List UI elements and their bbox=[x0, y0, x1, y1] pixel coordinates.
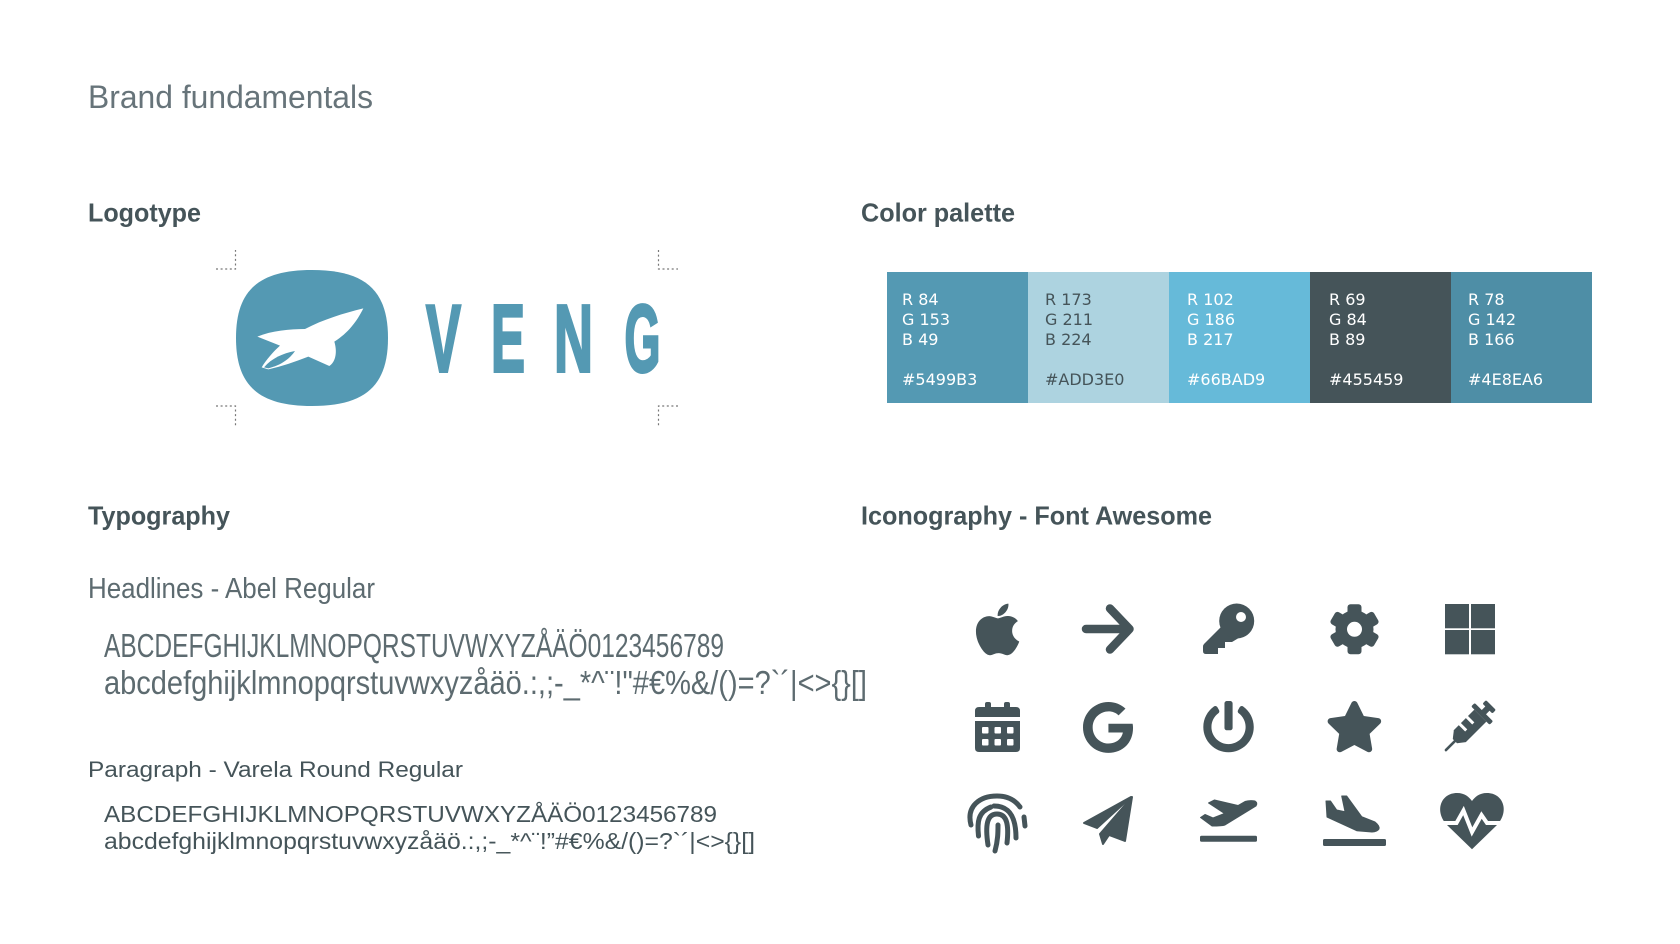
logo wordmark: N bbox=[554, 286, 593, 392]
panel: icon grid bbox=[970, 604, 1506, 851]
icon: key bbox=[1203, 604, 1254, 654]
icon: calendar bbox=[975, 702, 1020, 752]
swatch 3: #66BAD9 bbox=[1187, 370, 1265, 389]
swatch 3: B 217 bbox=[1187, 330, 1234, 349]
paragraph lowercase sample: abcdefghijklmnopqrstuvwxyzåäö.:,;-_*^¨!”#€%&/()=?`´|<>{}[] bbox=[104, 828, 755, 854]
swatch 3: R 102 bbox=[1187, 290, 1234, 309]
icon: google bbox=[1083, 702, 1133, 753]
title: Brand fundamentals bbox=[88, 79, 373, 115]
swatch 3: G 186 bbox=[1187, 310, 1235, 329]
icon: heartbeat bbox=[1438, 793, 1506, 849]
swatch 4 bbox=[1310, 272, 1451, 403]
icon: paper plane bbox=[1084, 797, 1132, 844]
swatch 3 bbox=[1169, 272, 1310, 403]
swatch 4: R 69 bbox=[1329, 290, 1366, 309]
swatch 1: #5499B3 bbox=[902, 370, 977, 389]
swatch 2: #ADD3E0 bbox=[1045, 370, 1124, 389]
icon: arrow right bbox=[1086, 608, 1130, 650]
icon: windows bbox=[1445, 604, 1495, 654]
icon: takeoff bbox=[1200, 800, 1257, 842]
swatch 5: R 78 bbox=[1468, 290, 1505, 309]
logo mark: rocket badge bbox=[236, 270, 388, 406]
swatch 4: #455459 bbox=[1329, 370, 1403, 389]
swatch 1: G 153 bbox=[902, 310, 950, 329]
swatch 4: B 89 bbox=[1329, 330, 1365, 349]
heading: color palette: Color palette bbox=[861, 198, 1015, 228]
headline font label: Headlines - Abel Regular bbox=[88, 573, 375, 605]
headline lowercase sample: abcdefghijklmnopqrstuvwxyzåäö.:,;-_*^¨!"#€%&/()=?`´|<>{}[] bbox=[104, 664, 867, 701]
heading: logotype: Logotype bbox=[88, 198, 201, 228]
swatch 2: G 211 bbox=[1045, 310, 1093, 329]
panel: color palette bbox=[887, 272, 1592, 403]
icon: fingerprint bbox=[970, 796, 1025, 851]
swatch 5 bbox=[1451, 272, 1592, 403]
headline uppercase sample: ABCDEFGHIJKLMNOPQRSTUVWXYZÅÄÖ0123456789 bbox=[104, 627, 724, 664]
paragraph uppercase sample: ABCDEFGHIJKLMNOPQRSTUVWXYZÅÄÖ0123456789 bbox=[104, 800, 717, 827]
swatch 2: B 224 bbox=[1045, 330, 1092, 349]
icon: apple bbox=[976, 604, 1019, 655]
swatch 5: #4E8EA6 bbox=[1468, 370, 1543, 389]
logo wordmark: V bbox=[426, 286, 461, 392]
swatch 1: R 84 bbox=[902, 290, 939, 309]
paragraph font label: Paragraph - Varela Round Regular bbox=[88, 757, 463, 782]
panel: logotype bbox=[216, 250, 678, 426]
panel: logotype: G bbox=[624, 286, 660, 392]
heading: typography: Typography bbox=[88, 500, 231, 530]
icon: gear bbox=[1329, 604, 1380, 654]
crop marks bbox=[216, 250, 678, 426]
heading: iconography: Iconography - Font Awesome bbox=[861, 500, 1212, 530]
swatch 1: B 49 bbox=[902, 330, 938, 349]
swatch 5: B 166 bbox=[1468, 330, 1515, 349]
logo wordmark: E bbox=[491, 286, 525, 392]
icon: star bbox=[1328, 701, 1381, 752]
swatch 4: G 84 bbox=[1329, 310, 1367, 329]
icon: landing bbox=[1323, 796, 1386, 846]
swatch 2 bbox=[1028, 272, 1169, 403]
swatch 5: G 142 bbox=[1468, 310, 1516, 329]
icon: power bbox=[1203, 701, 1254, 752]
swatch 1 bbox=[887, 272, 1028, 403]
swatch 2: R 173 bbox=[1045, 290, 1092, 309]
icon: syringe bbox=[1436, 696, 1500, 760]
panel: typography bbox=[88, 573, 867, 854]
logo wordmark bbox=[426, 286, 660, 392]
